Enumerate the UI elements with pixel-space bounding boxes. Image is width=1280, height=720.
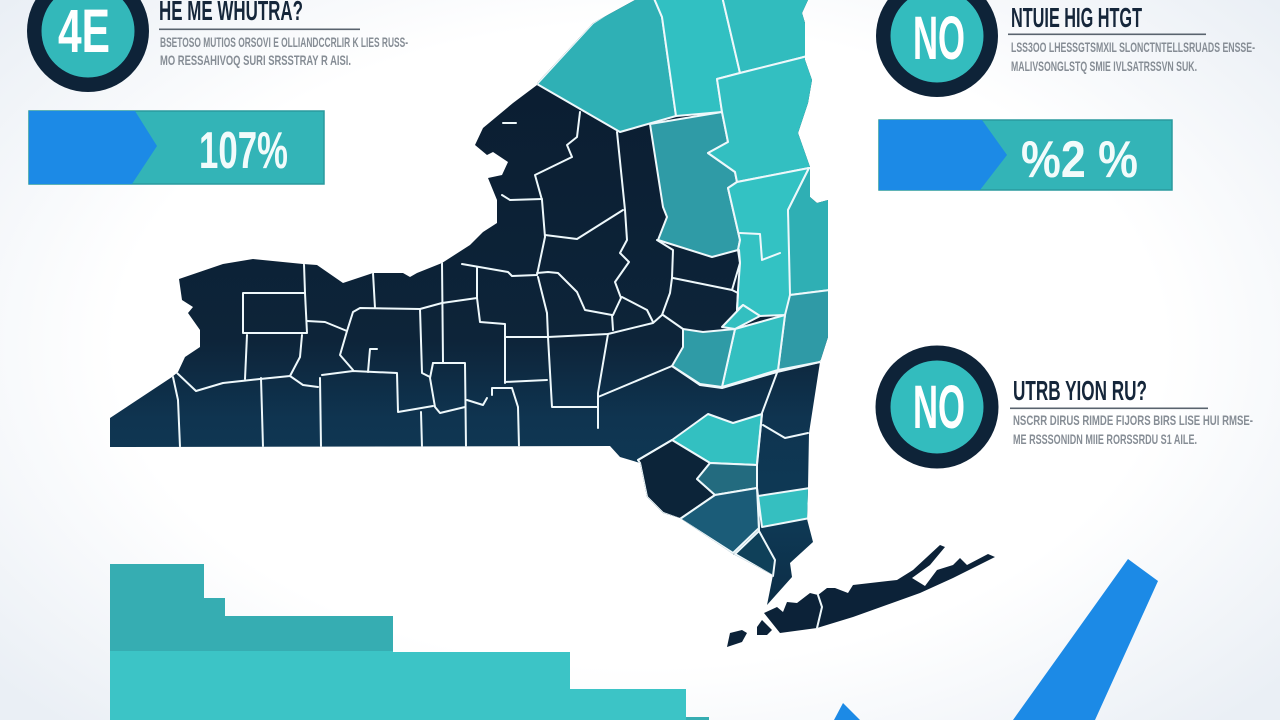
body text: MO RESSAHIVOQ SURI SRSSTRAY R AISI.: [160, 52, 351, 68]
body text: [1013, 412, 1253, 447]
body text: [160, 34, 408, 68]
darker upper steps: [110, 564, 393, 651]
percent bar: %2 %: %2 %: [1021, 131, 1138, 189]
heading: NTUIE HIG HTGT: [1011, 2, 1142, 33]
county borders: [173, 112, 820, 531]
map: New York State: [110, 0, 995, 647]
heading rule: [1008, 34, 1206, 35]
Long Island county divider: [817, 595, 822, 628]
body text: BSETOSO MUTIOS ORSOVI E OLLIANDCCRLIR K LIES RUSS-: [160, 34, 408, 50]
callout: top right: [876, 0, 1255, 97]
callout: top left: [27, 0, 408, 92]
heading rule: [159, 28, 360, 30]
island: Staten Island: [727, 630, 747, 647]
percent bar: %2 %: [879, 120, 1172, 190]
heading rule: [1010, 408, 1208, 409]
badge: NO: [876, 0, 998, 97]
body text: [1011, 39, 1255, 74]
blue arrow: [834, 559, 1158, 720]
badge: NO: NO: [913, 4, 965, 72]
arrow shaft: [1013, 559, 1158, 720]
teal counties: [537, 0, 830, 576]
callout: middle right: [876, 346, 1253, 468]
percent bar: 107%: [29, 111, 324, 184]
stepped bar chart: [110, 564, 709, 720]
percent bar: 107%: 107%: [199, 122, 288, 180]
badge: 4E: [27, 0, 149, 92]
island: Brooklyn: [757, 620, 772, 635]
arrow lower tip: [834, 703, 860, 720]
badge: NO: NO: [913, 373, 965, 441]
Long Island: [764, 545, 995, 633]
map base: dark counties: [110, 0, 828, 605]
lighter lower steps: [110, 651, 686, 720]
small bottom step: [686, 717, 709, 720]
badge: NO: [876, 346, 998, 468]
heading: UTRB YION RU?: [1013, 375, 1147, 406]
